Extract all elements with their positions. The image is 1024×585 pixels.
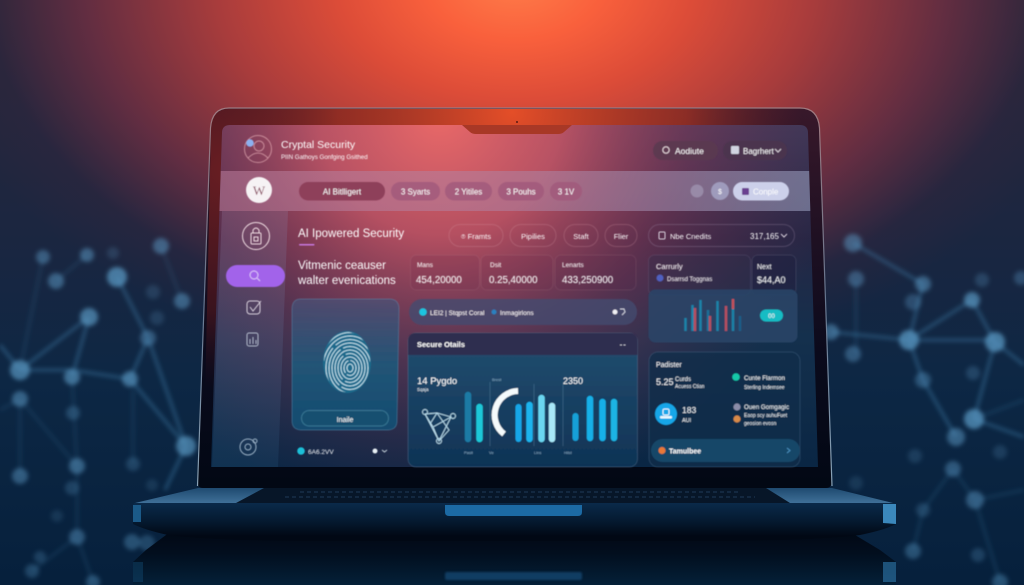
register panel	[649, 352, 800, 467]
axis labels: Pasit	[464, 450, 474, 455]
headline text: Vitmenic ceauser	[298, 260, 386, 272]
status pill: LEI2 | Stqpst Coral	[430, 310, 485, 317]
nav round buttons	[690, 182, 729, 200]
nav band	[246, 177, 789, 203]
nav pill 3	[445, 182, 492, 200]
bar group one	[468, 395, 480, 439]
brand name: Cryptal Security	[281, 139, 356, 151]
header account pill: Bagrhert	[743, 147, 774, 156]
icon: network polygon	[422, 410, 456, 444]
legend items lower: geosion evosn	[744, 421, 776, 427]
axis labels	[464, 377, 573, 455]
right blurred network	[823, 234, 1024, 585]
currency card: Dsarrsd Toggnas	[667, 277, 712, 283]
bar group two	[518, 398, 552, 439]
compile button	[733, 182, 789, 200]
nav round buttons: $	[718, 189, 722, 196]
axis lines	[490, 382, 563, 446]
nav pill 3: 2 Yitiles	[455, 188, 482, 196]
axis labels: Brest	[492, 377, 502, 382]
stat: lenarts: 433,250900	[562, 275, 614, 286]
fingerprint status row: 6A6.2VV	[308, 449, 334, 456]
header account pill	[723, 141, 787, 160]
mini bar chart panel	[648, 290, 798, 342]
nav pill 4	[498, 182, 544, 200]
left blurred network	[0, 238, 196, 585]
secure details panel	[408, 333, 638, 467]
metric value: 2350	[563, 376, 583, 386]
scan button: Inaile	[337, 417, 353, 424]
teal toggle: 00	[768, 314, 775, 320]
icon: lock badge	[242, 222, 270, 250]
compile button: Conple	[753, 188, 779, 196]
stat: lenarts: Lenarts	[562, 262, 584, 269]
brand subtitle: PIIN Gathoys Gonfging Gsithed	[281, 154, 368, 161]
legend items lower: Ouen Gomgagic	[744, 404, 789, 411]
panel header: Secure Otails	[417, 340, 465, 349]
tab two	[510, 224, 556, 246]
sidebar icons	[226, 222, 285, 455]
headline text: walter evenications	[297, 275, 396, 287]
active nav pill: AI Bitlligert	[323, 188, 362, 196]
progress arc	[495, 391, 518, 434]
tab four: Flier	[614, 232, 629, 241]
metric cards: Curds	[675, 377, 691, 383]
icon: W logo: W	[253, 183, 266, 198]
legend item teal: Sterling Indernsee	[744, 385, 785, 391]
bottom action pill	[651, 439, 800, 462]
header search pill	[653, 141, 718, 160]
next card: $44,A0	[757, 275, 786, 285]
icon: check box	[247, 301, 261, 314]
status pill	[409, 299, 637, 325]
laptop base	[133, 488, 896, 541]
fingerprint status row	[297, 447, 387, 456]
tab one: ⌾ Framts	[461, 232, 491, 241]
stat: dist	[481, 255, 553, 290]
metric cards: Acuess Ctian	[675, 384, 705, 390]
nav pill 5: 3 1V	[558, 188, 575, 196]
panel header	[408, 333, 638, 355]
tab three	[564, 224, 598, 246]
icon: blue lock badge	[655, 403, 677, 425]
active nav pill	[299, 182, 385, 200]
icon: W logo	[246, 177, 272, 203]
stat: dist: Dsit	[490, 262, 501, 269]
camera notch	[462, 121, 572, 134]
header brand	[244, 136, 368, 162]
stat: dist: 0.25,40000	[489, 275, 538, 286]
axis labels: Hilst	[564, 450, 573, 455]
legend item teal: Cunte Flarmon	[744, 375, 785, 382]
bar group three	[576, 399, 614, 438]
metric value: 183	[682, 405, 696, 415]
tab one	[449, 224, 503, 246]
panel title: Padister	[656, 362, 682, 369]
credits pill: Nbe Cnedits	[670, 232, 712, 241]
icon: settings target	[240, 439, 257, 455]
teal toggle	[760, 310, 783, 322]
credits pill	[648, 224, 794, 246]
tab four	[605, 224, 637, 246]
stat: mans: 454,20000	[416, 275, 462, 286]
next card: Next	[757, 264, 771, 271]
metric label: 14 Pygdo	[417, 376, 457, 387]
metric label: Sqaja	[417, 387, 429, 392]
credits pill: 317,165	[750, 232, 779, 241]
laptop lid and bezel	[197, 108, 832, 488]
icon: purple search button	[226, 265, 285, 287]
currency card	[648, 255, 750, 295]
stat: lenarts	[555, 255, 636, 290]
metric cards: 5.25	[656, 377, 674, 387]
nav pill 2: 3 Syarts	[401, 188, 430, 196]
header search pill: Aodiute	[675, 146, 704, 156]
stat: mans: Mans	[417, 262, 434, 269]
axis labels: Ve	[489, 450, 494, 455]
dashboard content	[226, 136, 800, 467]
bottom action pill: Tamulbee	[669, 448, 701, 456]
metric value: AUI	[682, 418, 692, 424]
icon: document chart	[247, 333, 258, 346]
legend item teal	[732, 373, 785, 391]
metric cards	[656, 377, 705, 390]
keyboard well	[236, 488, 790, 503]
next card	[752, 255, 796, 295]
nav pill 4: 3 Pouhs	[506, 188, 536, 196]
nav pill 5	[550, 182, 582, 200]
filter tabs	[449, 224, 637, 246]
laptop base reflection	[133, 532, 896, 585]
tab two: Pipilies	[521, 232, 545, 241]
tab three: Staft	[573, 232, 590, 241]
stat: mans	[410, 255, 480, 290]
fingerprint card	[292, 299, 399, 430]
currency card: Carrurly	[656, 262, 683, 271]
stat cards	[410, 255, 636, 290]
icon: fingerprint	[322, 330, 372, 394]
legend items lower: Eaop scy auhuFuet	[744, 413, 788, 419]
nav pill 2	[391, 182, 440, 200]
axis labels: Lins	[534, 450, 541, 455]
metric label	[417, 376, 457, 392]
section heading	[298, 228, 404, 246]
status pill: Inmagirlons	[500, 310, 534, 317]
trackpad notch	[445, 505, 582, 516]
icon: brand logo	[244, 136, 272, 162]
section heading: AI Ipowered Security	[298, 228, 404, 240]
headline text	[297, 260, 396, 287]
legend items lower	[733, 403, 789, 427]
laptop screen	[205, 120, 825, 470]
metric value	[682, 405, 696, 424]
